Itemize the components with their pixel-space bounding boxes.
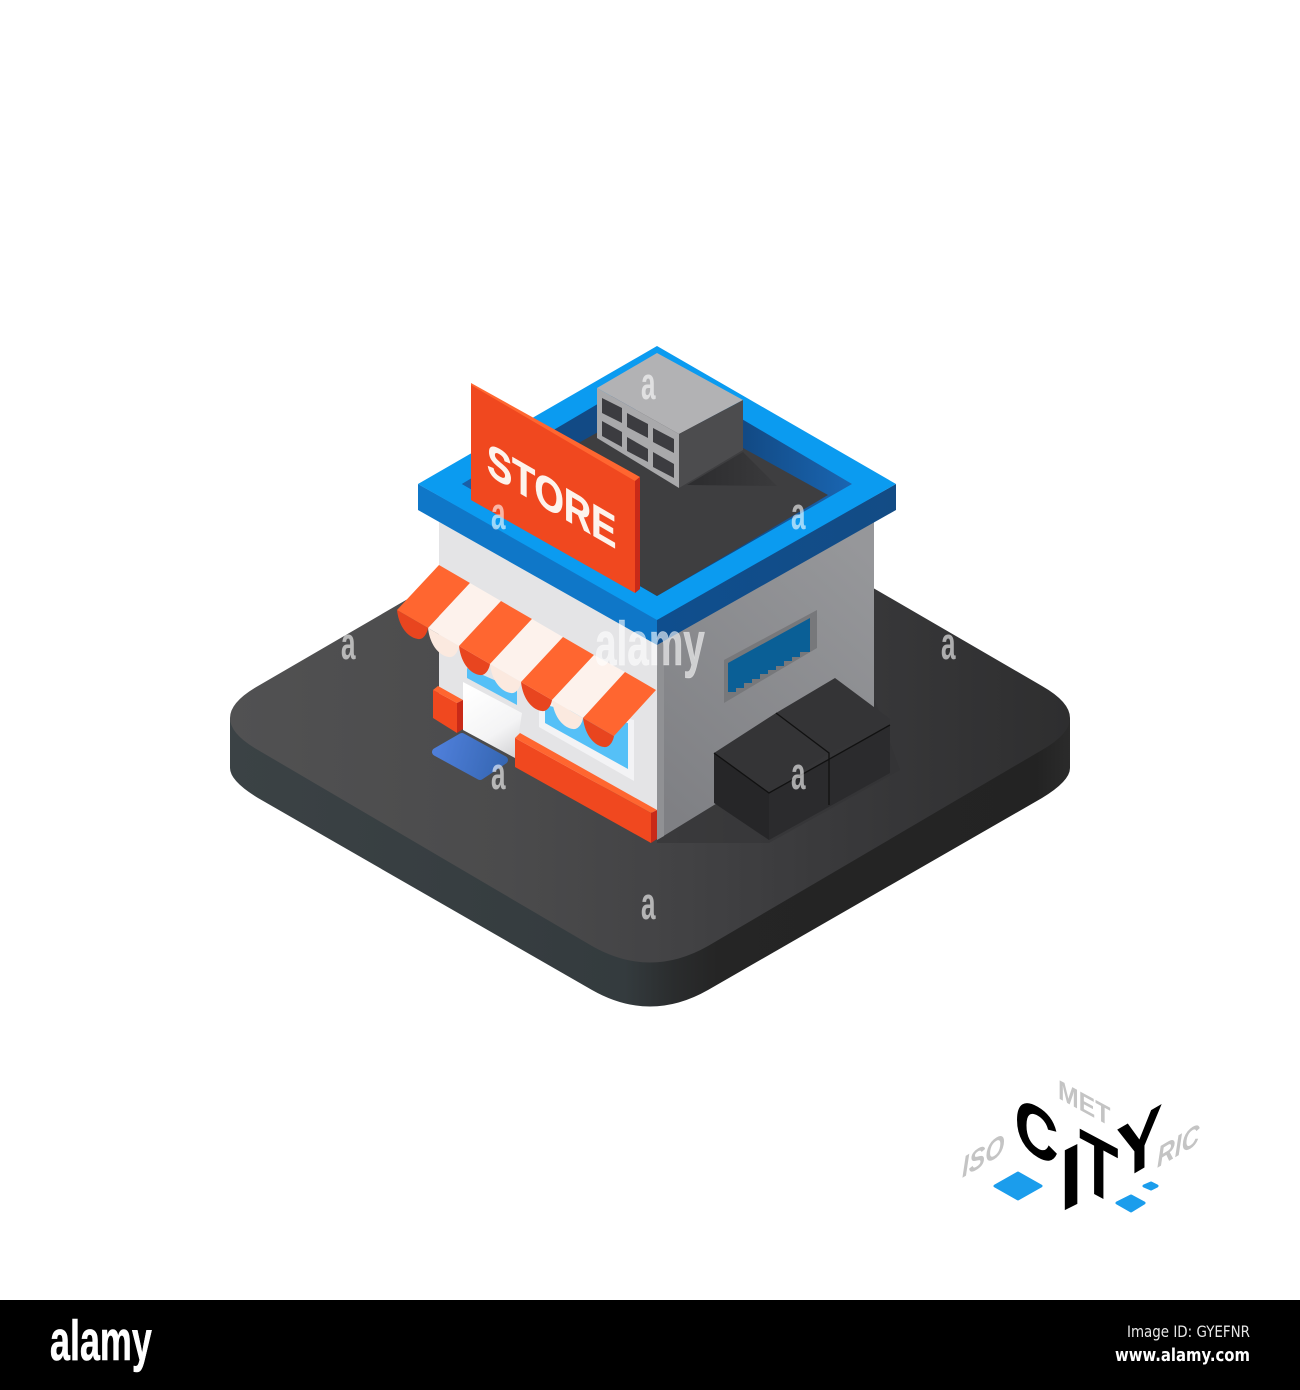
watermark: a — [491, 489, 506, 539]
sign text: STORE — [487, 433, 616, 559]
left kerb — [433, 686, 463, 733]
roof edge sides — [418, 484, 896, 645]
isometric city logo — [962, 1074, 1200, 1232]
footer logo: alamy — [50, 1310, 152, 1373]
air unit shadow — [687, 452, 777, 486]
logo diamonds — [995, 1173, 1157, 1211]
boxes by the wall — [714, 678, 890, 840]
watermark — [341, 359, 956, 929]
door window — [467, 668, 517, 705]
watermark: a — [791, 489, 806, 539]
image id: Image ID: GYEFNR — [1127, 1322, 1250, 1341]
logo word: CITY: T — [1079, 1110, 1119, 1225]
rooftop air unit — [597, 353, 743, 488]
front kerb — [515, 733, 657, 843]
logo word: CITY: C — [1015, 1079, 1058, 1183]
roof floor — [486, 399, 828, 596]
watermark: a — [341, 619, 356, 669]
shop window — [539, 698, 634, 781]
logo word: ISO: ISO — [962, 1128, 1004, 1185]
store sign — [471, 383, 640, 593]
right wall — [657, 520, 874, 840]
side window — [724, 610, 817, 703]
door mat — [436, 737, 504, 776]
watermark: a — [491, 749, 506, 799]
roof top rim — [418, 346, 896, 620]
striped awning — [397, 565, 656, 747]
logo word: CITY — [1015, 1079, 1163, 1232]
store building — [397, 346, 896, 843]
watermark: a — [791, 749, 806, 799]
logo word: CITY: I — [1059, 1122, 1083, 1232]
air unit grille — [602, 398, 674, 478]
logo word: MET: MET — [1058, 1074, 1111, 1132]
watermark: a — [641, 879, 656, 929]
watermark: a — [941, 619, 956, 669]
watermark: a — [641, 359, 656, 409]
watermark: alamy — [595, 609, 705, 678]
left wall — [439, 522, 657, 815]
inner roof walls — [462, 369, 852, 596]
website: www.alamy.com — [1115, 1345, 1250, 1366]
logo word: CITY: Y — [1116, 1086, 1163, 1201]
door — [463, 682, 522, 758]
logo word: RIC: RIC — [1157, 1117, 1200, 1175]
platform base — [230, 476, 1070, 1006]
footer bar — [0, 1300, 1300, 1390]
